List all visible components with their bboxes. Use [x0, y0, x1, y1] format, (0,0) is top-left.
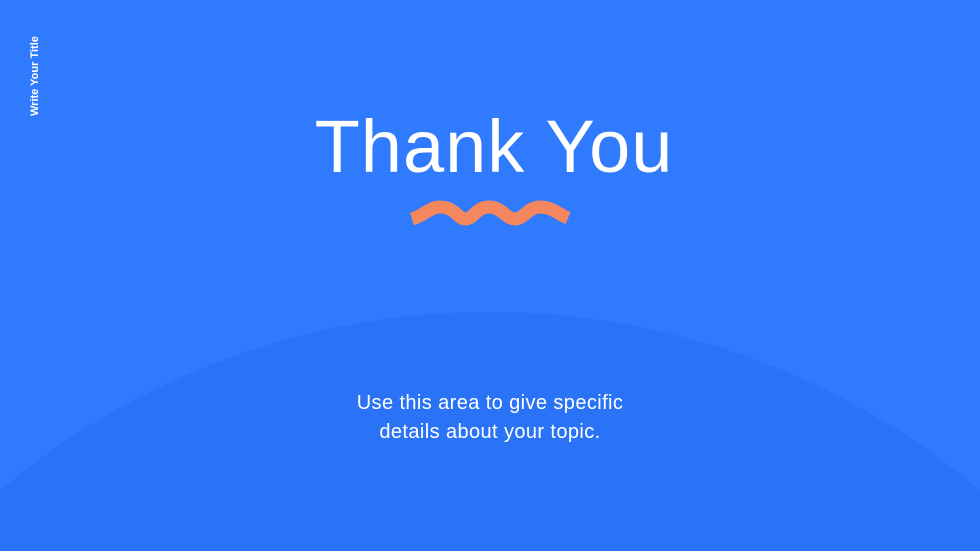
vertical side title: Write Your Title [29, 36, 41, 116]
icon: orange wave [410, 200, 570, 226]
title: Thank You [315, 105, 673, 188]
body text [357, 392, 623, 443]
body text: Use this area to give specific [357, 392, 623, 414]
body text: details about your topic. [379, 421, 601, 443]
